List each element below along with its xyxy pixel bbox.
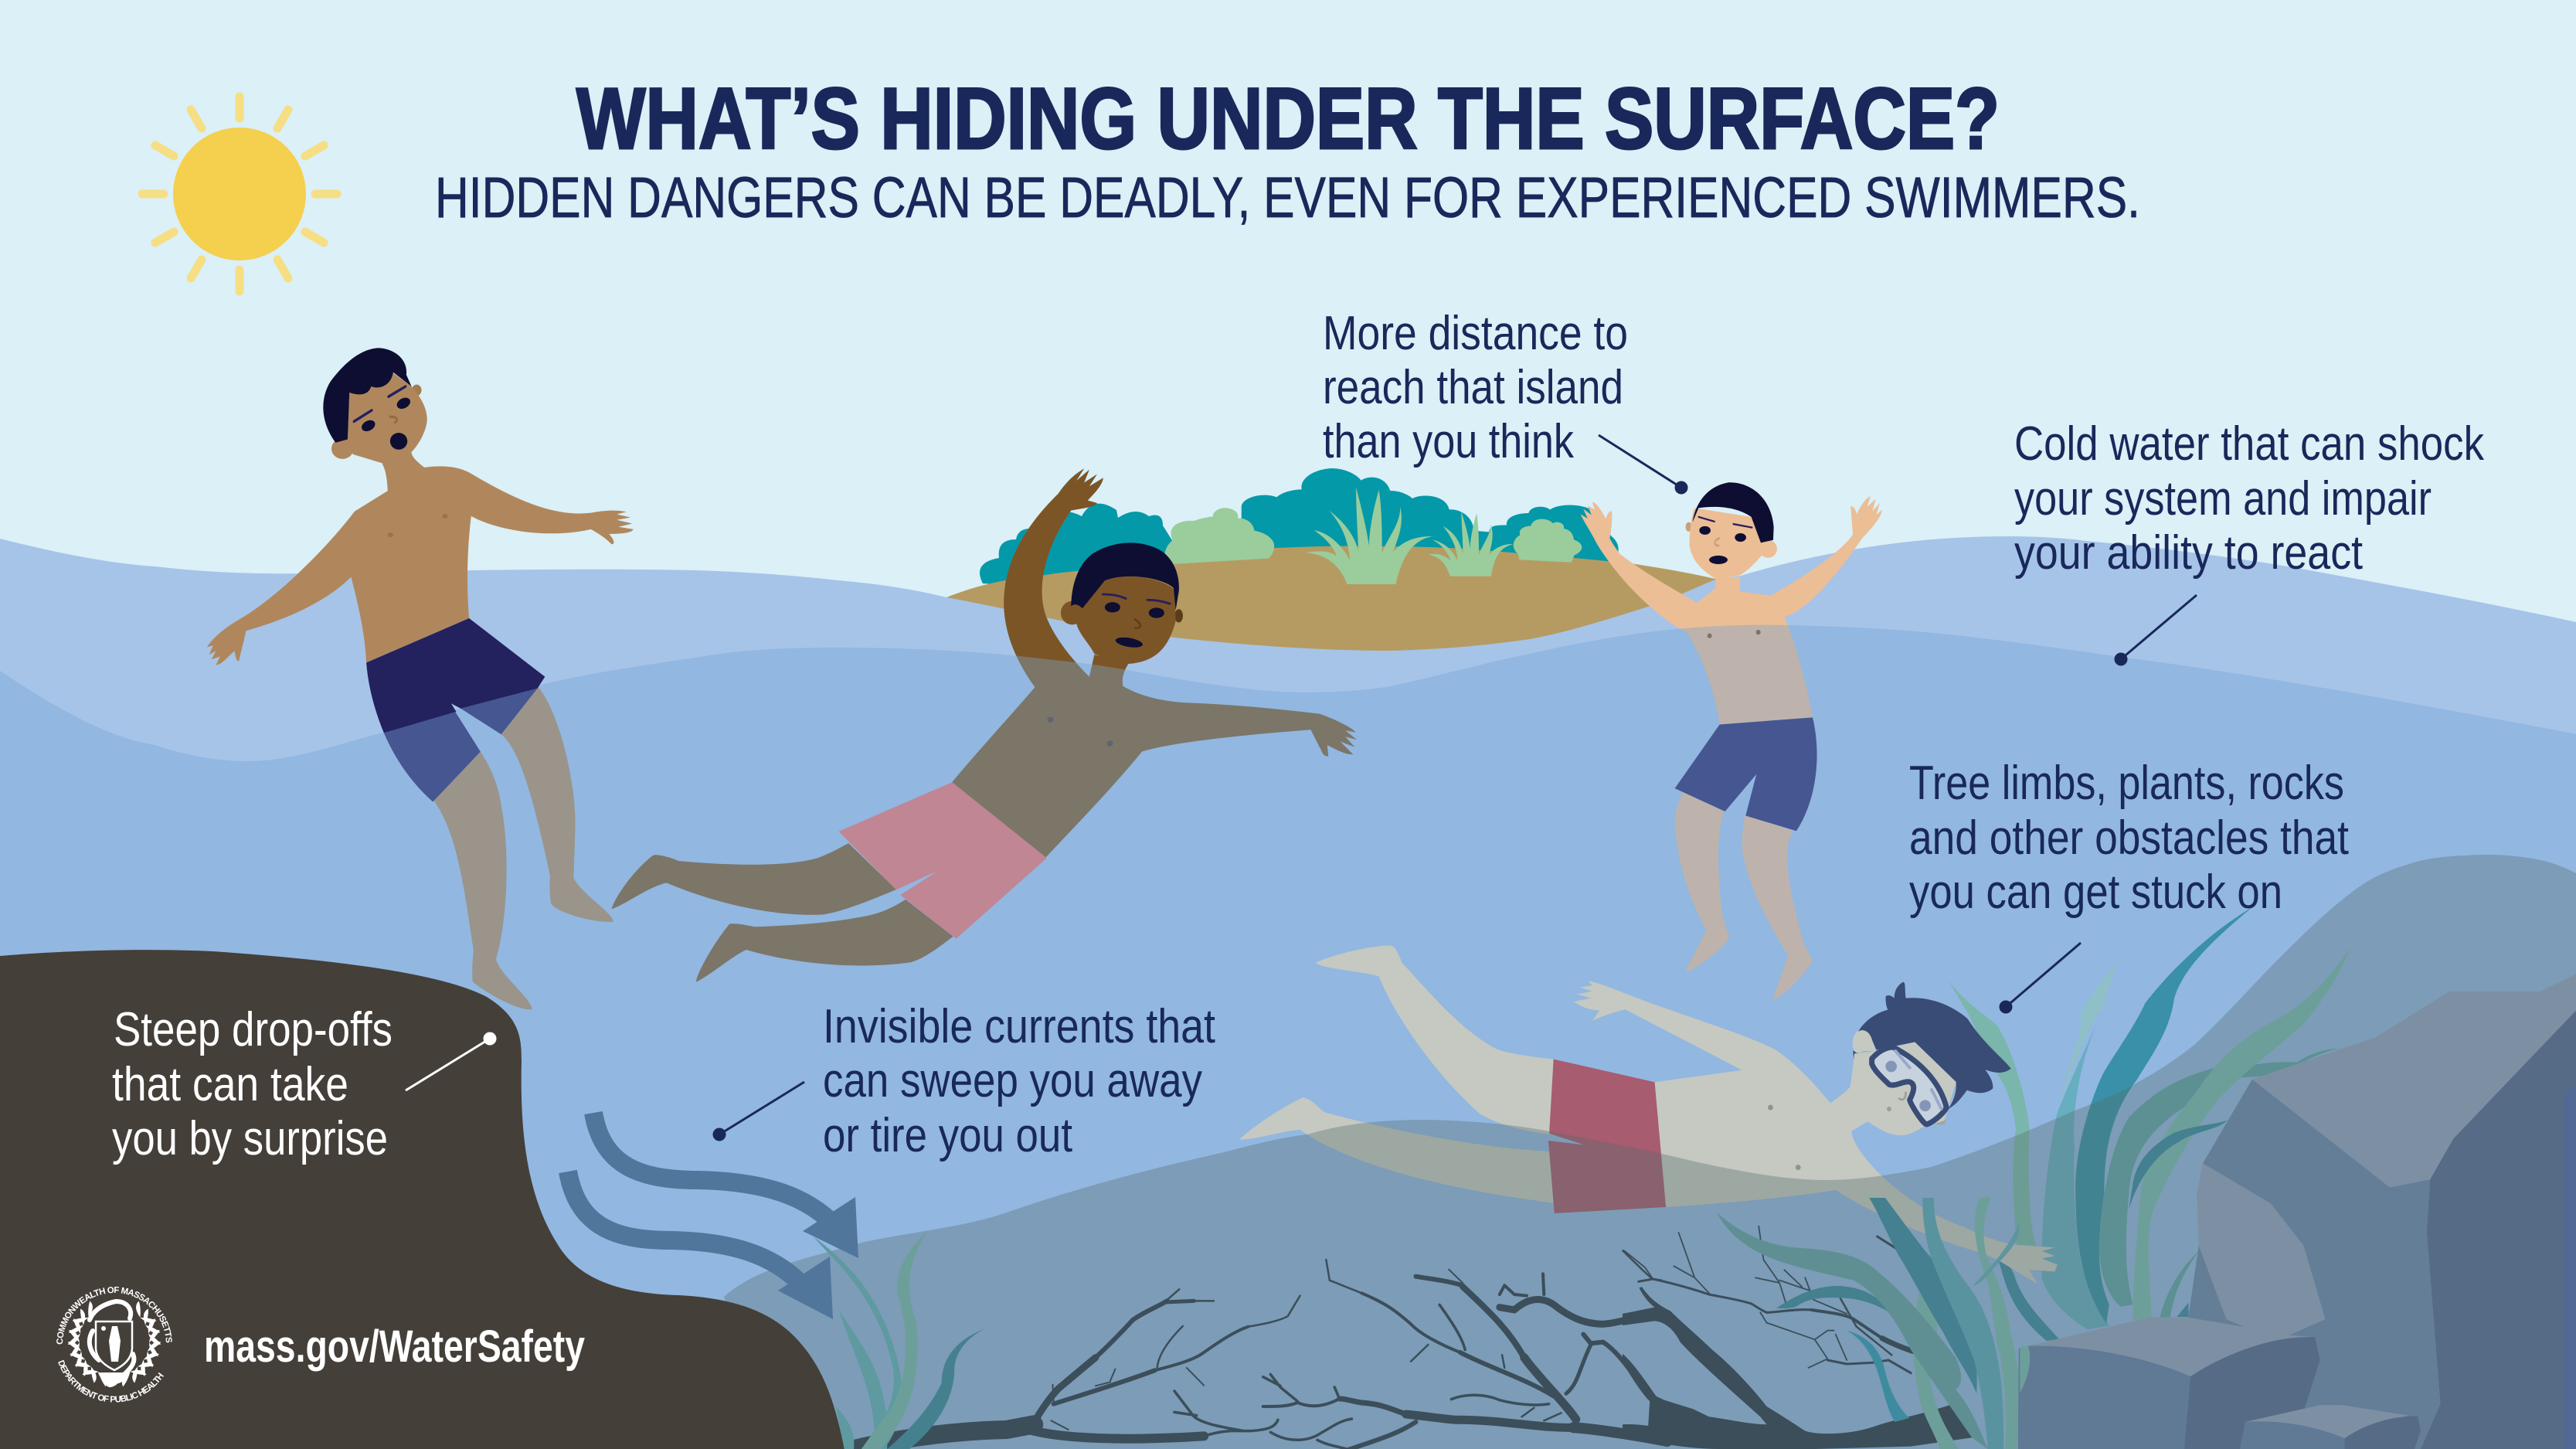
head with goggles [1818,982,2011,1138]
small boulder [2240,1405,2421,1449]
shorts [839,782,1047,939]
callout: drop-offs: that can take [112,1058,348,1111]
arrow: current upper [593,1113,858,1258]
rocks [2018,975,2576,1449]
callout: cold water [2014,417,2485,666]
shield [96,1321,132,1370]
callout: drop-offs: you by surprise [112,1112,388,1165]
callout: drop-offs [112,1003,496,1165]
torso and arms [207,452,634,665]
callout: currents: can sweep you away [823,1054,1202,1107]
swimmer: treading boy [1581,482,1882,1000]
subtitle: HIDDEN DANGERS CAN BE DEADLY, EVEN FOR EXPERIENCED SWIMMERS. [435,165,2140,230]
callout: obstacles: Tree limbs, plants, rocks [1909,757,2344,810]
logo: department of public health seal [56,1287,172,1402]
swimmer: diving boy [612,468,1357,982]
head [1686,482,1777,579]
website link: mass.gov/WaterSafety [204,1321,585,1372]
icon: sun [142,97,337,291]
callout: island distance: than you think [1323,415,1575,468]
callout: island distance: reach that island [1323,361,1623,414]
title: WHAT’S HIDING UNDER THE SURFACE? [576,70,2000,167]
callout: cold water: your ability to react [2014,526,2363,580]
callout: cold water: Cold water that can shock [2014,417,2485,471]
callout: currents: or tire you out [823,1109,1072,1162]
arrow: current lower [568,1172,833,1319]
boulder [2018,1318,2320,1449]
callout: obstacles: and other obstacles that [1909,811,2349,865]
logo: department of public health seal: DEPARTMENT OF PUBLIC HEALTH [58,1360,164,1402]
head [1061,543,1183,667]
snake [90,1301,134,1385]
callout: obstacles: you can get stuck on [1909,866,2282,919]
swimmer: falling boy [207,348,634,1009]
callout: currents: Invisible currents that [823,1000,1215,1053]
shorts [1675,717,1817,831]
front water [0,625,2576,1449]
callout: island distance: More distance to [1323,307,1628,360]
kelp: right cluster in front of swimmer [1717,1198,2020,1449]
bush: left green [1164,508,1274,564]
kelp: right cluster behind swimmer [1948,907,2351,1341]
icon: grass tuft small [1428,512,1514,577]
island [927,468,1746,665]
legs [434,686,613,1009]
callout: drop-offs: Steep drop-offs [114,1003,393,1056]
callout: cold water: your system and impair [2014,472,2432,526]
callout: currents [712,1000,1215,1162]
icon: grass tuft large [1307,488,1432,584]
logo: department of public health seal: COMMONWEALTH OF MASSACHUSETTS [56,1287,172,1345]
callout: obstacles [1909,757,2349,1014]
branches [845,1226,1973,1449]
legs [612,843,896,915]
back water [0,536,2576,1449]
swimmer: snorkeler [1240,945,2058,1284]
shorts [366,618,545,802]
dark shore drop-off [0,950,845,1449]
wreath [68,1301,161,1386]
kelp: left cluster [814,1232,987,1449]
seabed [724,855,2576,1449]
bush: right green [1514,519,1582,563]
upper body above the waterline [1581,496,1882,629]
callout: island distance [1323,307,1687,495]
legs [1675,792,1729,972]
upper body above the waterline [1004,468,1128,669]
head [323,348,427,464]
